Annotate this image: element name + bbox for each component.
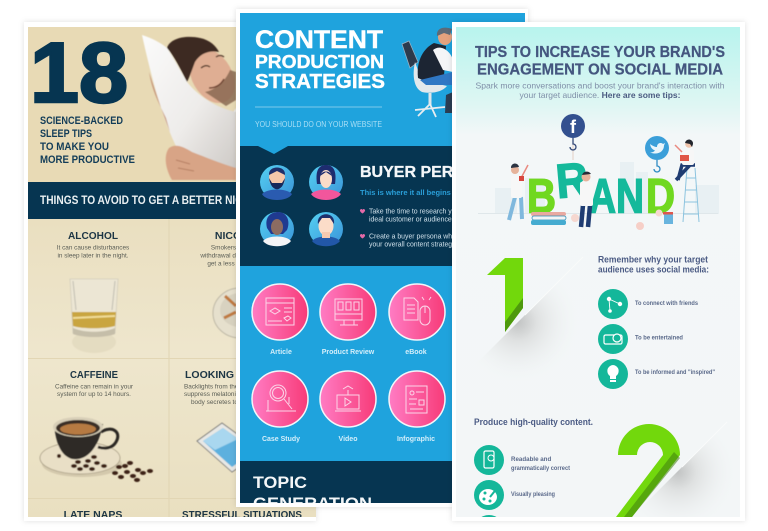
band: topic generation xyxy=(240,461,452,503)
subtitle: TO MAKE YOU xyxy=(40,141,109,153)
content type: case study: Case Study xyxy=(262,436,300,443)
cell: looking at screens xyxy=(184,371,236,406)
heading: tip 1: Remember why your target xyxy=(598,254,708,264)
band: topic generation: TOPIC xyxy=(253,473,307,492)
avatar 1 xyxy=(260,165,294,200)
avatar 2 xyxy=(309,165,343,200)
reason: connect with friends xyxy=(598,289,699,319)
bullet list: your overall content strategy. xyxy=(369,242,457,248)
reason: be entertained: To be entertained xyxy=(635,334,683,342)
quality: third item icon xyxy=(474,515,504,531)
subtitle: YOU SHOULD DO ON YOUR WEBSITE xyxy=(255,120,382,129)
band: things to avoid xyxy=(28,182,236,219)
cell: caffeine xyxy=(55,369,134,398)
band: buyer persona xyxy=(240,146,452,266)
subtitle: MORE PRODUCTIVE xyxy=(40,154,135,166)
title: STRATEGIES xyxy=(255,71,385,93)
figure: man centre xyxy=(580,172,593,227)
word: BRAND xyxy=(529,162,674,214)
quality: visually pleasing: Visually pleasing xyxy=(511,491,555,498)
title: TIPS TO INCREASE YOUR BRAND'S xyxy=(475,44,725,61)
word: BRAND: D xyxy=(646,170,675,224)
cell: caffeine: Caffeine can remain in your xyxy=(55,384,134,390)
panel: content production strategies card xyxy=(236,9,528,513)
cell: late naps: LATE NAPS xyxy=(64,509,122,521)
title: PRODUCTION xyxy=(255,51,384,72)
big number 18: 18 xyxy=(30,26,128,121)
intro text xyxy=(476,82,724,100)
panel: brand engagement card xyxy=(452,22,768,531)
intro text: your target audience. Here are some tips: xyxy=(520,90,681,100)
quality: readable: grammatically correct xyxy=(511,465,570,472)
cell: looking at screens: suppress melatonin that your xyxy=(184,391,267,398)
reason: be informed: To be informed and "inspired" xyxy=(635,369,715,376)
intro text: Spark more conversations and boost your brand's interaction with xyxy=(476,80,725,90)
heading: tip 1: audience uses social media: xyxy=(598,264,709,274)
content type: article: Article xyxy=(270,349,292,356)
big numeral 2 with paper fold xyxy=(616,422,768,531)
word: BRAND: R xyxy=(554,154,590,209)
big numeral 1 with paper fold xyxy=(467,257,640,420)
photo: smartphone xyxy=(196,422,236,473)
cell: nicotine xyxy=(200,232,236,267)
cell: nicotine: Smokers experience xyxy=(211,244,270,252)
cell: alcohol: in sleep later in the night. xyxy=(57,252,129,260)
band: things to avoid: THINGS TO AVOID TO GET A BETTER NIGHT'S SLEEP xyxy=(40,195,302,207)
cell: nicotine: withdrawal during sleep and xyxy=(199,252,280,260)
illustration: brand letters and people xyxy=(478,114,719,230)
figure: woman on ladder xyxy=(675,139,699,222)
cell: nicotine: get a less restful sleep. xyxy=(207,260,273,268)
cell: caffeine: system for up to 14 hours. xyxy=(57,391,131,398)
cell: looking at screens: body secretes to sleep. xyxy=(191,399,257,406)
subtitle xyxy=(40,115,135,166)
heading: buyer persona: BUYER PERSONA xyxy=(360,164,500,181)
title xyxy=(255,30,384,88)
reason: connect with friends: To connect with friends xyxy=(635,300,699,307)
heading: tip 1 xyxy=(598,254,709,274)
panel: sleep tips infographic card xyxy=(24,22,316,521)
cell: alcohol: It can cause disturbances xyxy=(57,244,129,252)
content type: ebook xyxy=(389,284,445,356)
cell: alcohol: ALCOHOL xyxy=(68,230,119,242)
title: ENGAGEMENT ON SOCIAL MEDIA xyxy=(477,62,723,78)
content type: infographic xyxy=(389,371,445,443)
icon: whisky glass xyxy=(70,279,118,353)
photo: coffee cup with beans xyxy=(40,417,153,482)
icon: ashtray xyxy=(212,288,236,338)
content type: video xyxy=(320,371,376,443)
word: BRAND: N xyxy=(616,170,644,224)
cell: stressful situations: STRESSFUL SITUATIONS xyxy=(182,509,302,521)
subtitle: SCIENCE-BACKED xyxy=(40,115,123,127)
bullet list: Take the time to research your xyxy=(369,208,462,216)
title: CONTENT xyxy=(255,26,383,54)
avatar 3 xyxy=(260,212,294,246)
cell: nicotine: NICOTINE xyxy=(215,230,265,242)
quality: visually pleasing xyxy=(474,480,555,510)
word: BRAND: A xyxy=(589,170,616,224)
content type: product review xyxy=(320,284,376,356)
subtitle: SLEEP TIPS xyxy=(40,128,92,140)
content type: video: Video xyxy=(339,436,357,443)
quality: readable xyxy=(474,445,570,475)
content type: product review: Product Review xyxy=(322,349,375,356)
band: buyer persona: This is where it all begins xyxy=(360,188,451,197)
cell: looking at screens: Backlights from these devices xyxy=(184,384,269,390)
bullet list xyxy=(360,208,462,248)
avatar 4 xyxy=(309,212,343,246)
quality: readable: Readable and xyxy=(511,456,551,463)
band: topic generation: GENERATION xyxy=(253,494,372,513)
icon: twitter balloon xyxy=(645,136,669,172)
bullet list: ideal customer or audience. xyxy=(369,216,454,224)
content type: ebook: eBook xyxy=(405,349,427,356)
figure: man left xyxy=(509,163,528,220)
icon: books xyxy=(531,212,566,225)
content type: case study xyxy=(252,371,308,443)
icon: facebook balloon xyxy=(561,114,585,160)
illustration: man on office chair xyxy=(402,28,453,117)
content type: infographic: Infographic xyxy=(397,436,435,443)
cell: looking at screens: LOOKING AT SCREENS xyxy=(185,369,303,381)
reason: be informed xyxy=(598,359,715,389)
photo: man hugging pillow xyxy=(142,35,244,180)
cell: caffeine: CAFFEINE xyxy=(70,369,118,381)
reason: be entertained xyxy=(598,324,683,354)
word: BRAND: B xyxy=(527,170,556,224)
content type: article xyxy=(252,284,308,356)
title xyxy=(475,46,725,75)
heading: tip 2: Produce high-quality content. xyxy=(474,417,593,427)
cell: alcohol xyxy=(57,230,129,260)
icon: facebook balloon: f xyxy=(570,117,577,137)
icon: gift and light bulb xyxy=(571,210,673,230)
bullet list: Create a buyer persona which xyxy=(369,234,461,240)
